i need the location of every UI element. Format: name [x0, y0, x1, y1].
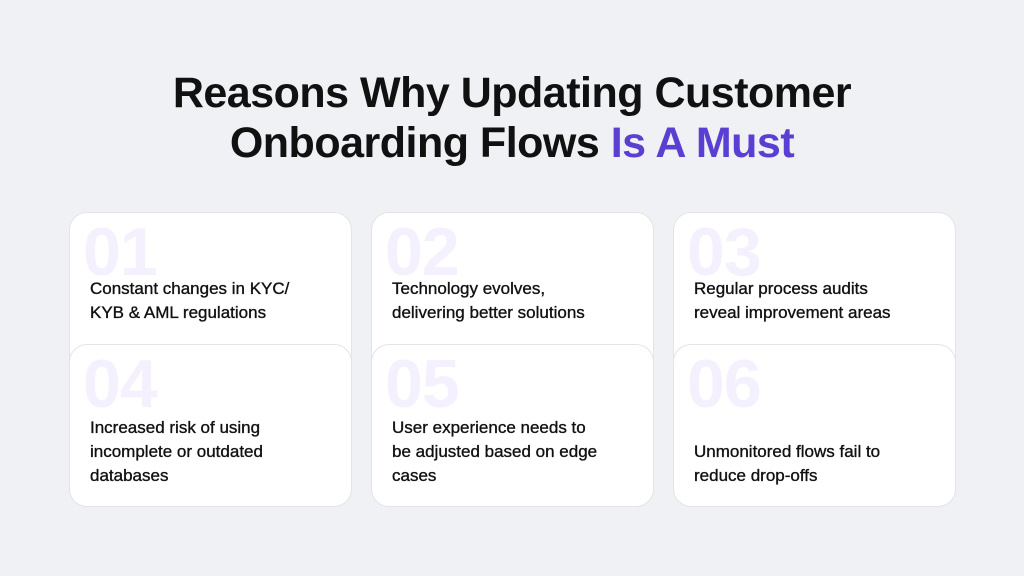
card 05: 05 [385, 346, 459, 422]
card 03: Regular process audits [694, 279, 868, 298]
card 02: 02 [385, 214, 459, 290]
title: Onboarding Flows Is A Must [230, 119, 794, 167]
title: Reasons Why Updating Customer [173, 69, 851, 117]
card 04: Increased risk of using [90, 418, 260, 437]
card 03 [673, 212, 956, 412]
card 02: delivering better solutions [392, 303, 585, 322]
card 05: be adjusted based on edge [392, 442, 597, 461]
card 03: 03 [687, 214, 761, 290]
card 06 [673, 344, 956, 507]
card 04: 04 [83, 346, 157, 422]
card 06: 06 [687, 346, 761, 422]
card 04 [69, 344, 352, 507]
card 02 [371, 212, 654, 412]
card 01: 01 [83, 214, 157, 290]
card 01: KYB & AML regulations [90, 303, 266, 322]
card 06: Unmonitored flows fail to [694, 442, 880, 461]
card 05: cases [392, 466, 436, 485]
title [173, 69, 851, 167]
card 06: reduce drop-offs [694, 466, 817, 485]
card 01 [69, 212, 352, 412]
card 05 [371, 344, 654, 507]
card 01: Constant changes in KYC/ [90, 279, 289, 298]
card 02: Technology evolves, [392, 279, 545, 298]
card 04: databases [90, 466, 168, 485]
card 05: User experience needs to [392, 418, 586, 437]
card 03: reveal improvement areas [694, 303, 891, 322]
card 04: incomplete or outdated [90, 442, 263, 461]
